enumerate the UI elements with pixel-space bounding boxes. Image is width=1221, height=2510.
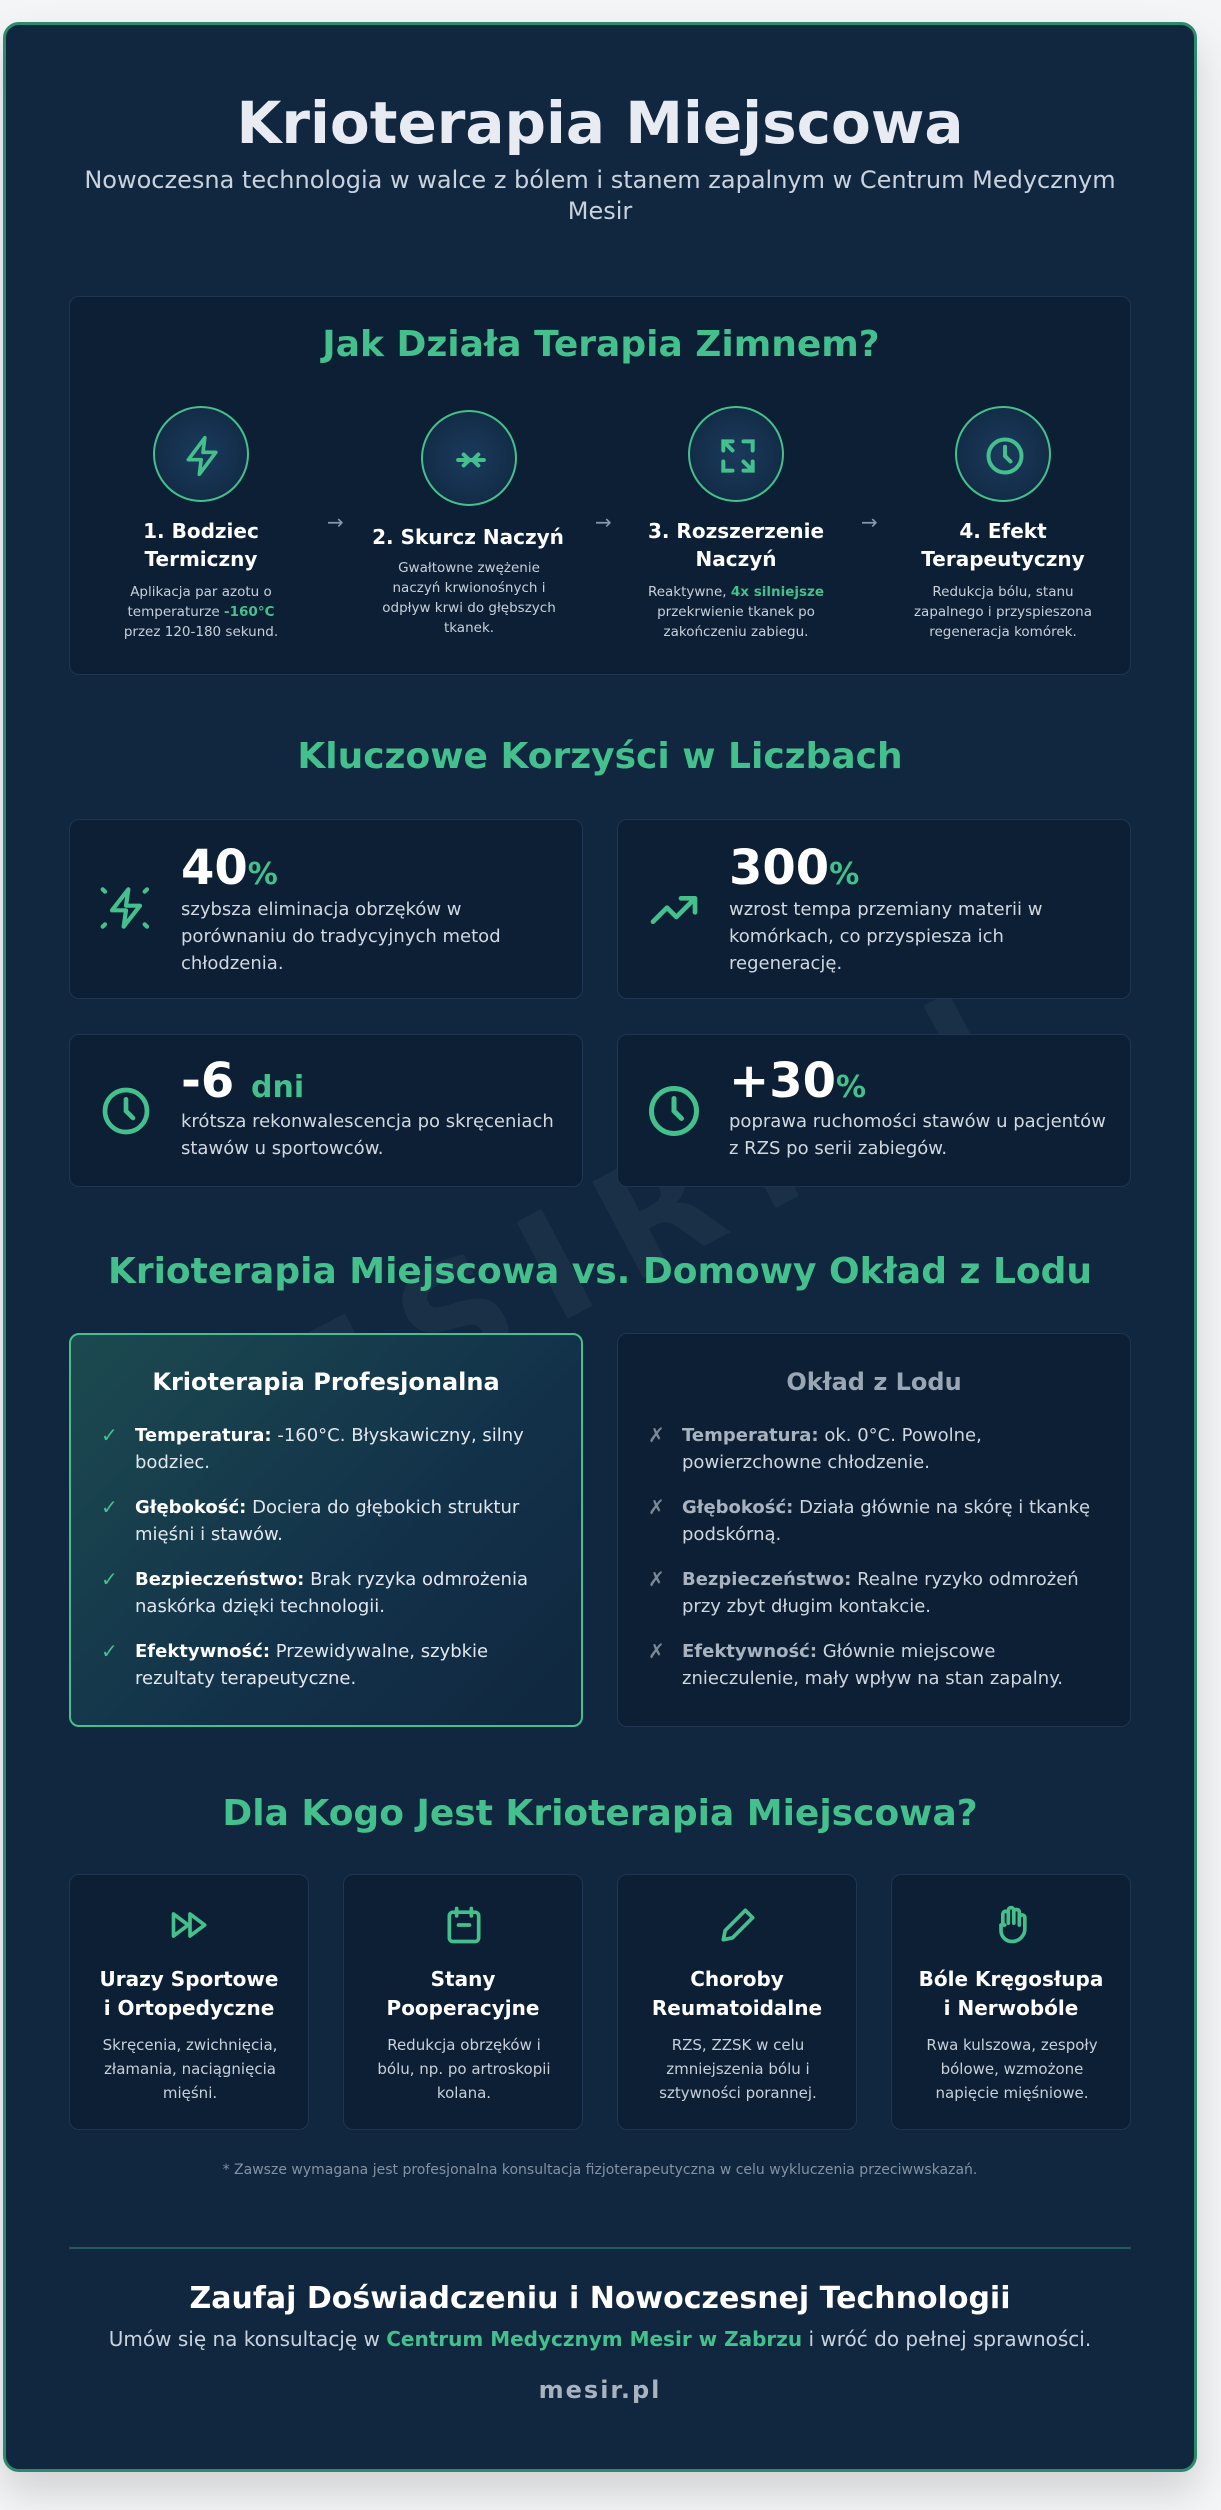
icon: clock: [102, 1088, 150, 1134]
item safety: Bezpieczeństwo: Brak ryzyka odmrożenia naskórka dzięki technologii.: [135, 1569, 528, 1617]
card: rheumatoid: Choroby: [690, 1967, 784, 1991]
item temperature: Temperatura: ok. 0°C. Powolne, powierzchowne chłodzenie.: [682, 1425, 982, 1473]
title: Krioterapia Miejscowa: [236, 89, 964, 157]
icon: lightning: [153, 406, 249, 502]
stat card 2: wzrost tempa przemiany materii w komórkach, co przyspiesza ich regenerację.: [729, 899, 1042, 974]
footer text: Umów się na konsultację w Centrum Medycznym Mesir w Zabrzu i wróć do pełnej sprawności.: [109, 2327, 1091, 2351]
heading: comparison: Krioterapia Miejscowa vs. Domowy Okład z Lodu: [108, 1251, 1092, 1292]
icon: hand: [999, 1906, 1027, 1944]
panel: professional: [69, 1333, 583, 1727]
heading: how it works: Jak Działa Terapia Zimnem?: [322, 324, 880, 365]
stat card 3: [69, 1034, 583, 1187]
card: sports injuries: [69, 1874, 309, 2130]
icon: trending up: [650, 896, 698, 924]
item depth: Głębokość: Dociera do głębokich struktur mięśni i stawów.: [135, 1497, 519, 1545]
card: rheumatoid: [617, 1874, 857, 2130]
card: postoperative: Pooperacyjne: [387, 1996, 539, 2020]
panel: ice pack: ✗: [648, 1495, 665, 1519]
panel: professional: ✓: [101, 1495, 118, 1519]
icon: fast forward: [172, 1912, 207, 1938]
step 1: 1. Bodziec Termiczny: [143, 519, 259, 571]
stat card 1: 40%: [181, 840, 278, 896]
arrow 3: →: [861, 510, 878, 534]
heading: benefits: Kluczowe Korzyści w Liczbach: [297, 736, 903, 777]
item temperature: Temperatura: -160°C. Błyskawiczny, silny bodziec.: [135, 1425, 524, 1473]
heading: for whom: Dla Kogo Jest Krioterapia Miejscowa?: [222, 1793, 978, 1834]
subtitle: Nowoczesna technologia w walce z bólem i stanem zapalnym w Centrum Medycznym Mesir: [84, 166, 1116, 225]
step 3: [648, 406, 824, 640]
icon: sparkle bolt: [100, 887, 150, 929]
card: rheumatoid: RZS, ZZSK w celu zmniejszenia bólu i sztywności porannej.: [659, 2036, 817, 2102]
stat card 2: [617, 819, 1131, 999]
icon: contract: [421, 410, 517, 506]
card: postoperative: Redukcja obrzęków i bólu, np. po artroskopii kolana.: [377, 2036, 551, 2102]
card: sports injuries: i Ortopedyczne: [104, 1996, 274, 2020]
panel: ice pack: ✗: [648, 1567, 665, 1591]
card: sports injuries: Skręcenia, zwichnięcia, złamania, naciągnięcia mięśni.: [103, 2036, 277, 2102]
item depth: Głębokość: Działa głównie na skórę i tkankę podskórną.: [682, 1497, 1090, 1545]
footer heading: Zaufaj Doświadczeniu i Nowoczesnej Technologii: [189, 2281, 1010, 2316]
stat card 1: [69, 819, 583, 999]
website: mesir.pl: [539, 2376, 661, 2404]
step 3: Reaktywne, 4x silniejsze przekrwienie tkanek po zakończeniu zabiegu.: [648, 584, 824, 640]
step 2: 2. Skurcz Naczyń: [372, 525, 564, 549]
item safety: Bezpieczeństwo: Realne ryzyko odmrożeń przy zbyt długim kontakcie.: [682, 1569, 1079, 1617]
panel: professional: ✓: [101, 1639, 118, 1663]
stat card 3: krótsza rekonwalescencja po skręceniach stawów u sportowców.: [181, 1111, 554, 1159]
icon: clock: [955, 406, 1051, 502]
card: spine: Bóle Kręgosłupa: [919, 1967, 1103, 1991]
panel: professional: ✓: [101, 1423, 118, 1447]
panel: ice pack: ✗: [648, 1423, 665, 1447]
icon: calendar: [448, 1906, 480, 1944]
item effectiveness: Efektywność: Przewidywalne, szybkie rezultaty terapeutyczne.: [135, 1641, 488, 1689]
arrow 1: →: [327, 510, 344, 534]
step 4: Redukcja bólu, stanu zapalnego i przyspieszona regeneracja komórek.: [914, 584, 1092, 640]
icon: pencil: [722, 1908, 755, 1942]
card: spine: i Nerwobóle: [944, 1996, 1078, 2020]
step 2: [372, 410, 564, 636]
panel: ice pack: ✗: [648, 1639, 665, 1663]
card: postoperative: [343, 1874, 583, 2130]
card: rheumatoid: Reumatoidalne: [652, 1996, 822, 2020]
step 3: 3. Rozszerzenie Naczyń: [648, 519, 824, 571]
icon: clock: [649, 1086, 699, 1136]
stat card 2: 300%: [729, 840, 859, 896]
box title: Okład z Lodu: [786, 1368, 962, 1396]
card: spine: [891, 1874, 1131, 2130]
step 4: 4. Efekt Terapeutyczny: [921, 519, 1085, 571]
card: spine: Rwa kulszowa, zespoły bólowe, wzmożone napięcie mięśniowe.: [926, 2036, 1098, 2102]
footnote: * Zawsze wymagana jest profesjonalna konsultacja fizjoterapeutyczna w celu wykluczenia przeciwwskazań.: [223, 2162, 977, 2178]
icon: expand: [688, 406, 784, 502]
card: postoperative: Stany: [431, 1967, 495, 1991]
stat card 3: -6 dni: [181, 1053, 304, 1109]
stat card 4: [617, 1034, 1131, 1187]
step 1: [124, 406, 278, 640]
panel: ice pack: [617, 1333, 1131, 1727]
step 4: [914, 406, 1092, 640]
card: sports injuries: Urazy Sportowe: [100, 1967, 278, 1991]
arrow 2: →: [595, 510, 612, 534]
stat card 1: szybsza eliminacja obrzęków w porównaniu do tradycyjnych metod chłodzenia.: [181, 899, 501, 974]
stat card 4: +30%: [729, 1053, 866, 1109]
panel: professional: ✓: [101, 1567, 118, 1591]
item effectiveness: Efektywność: Głównie miejscowe znieczulenie, mały wpływ na stan zapalny.: [682, 1641, 1063, 1689]
panel: how it works: [69, 296, 1131, 675]
step 1: Aplikacja par azotu o temperaturze -160°C przez 120-180 sekund.: [124, 584, 278, 640]
watermark: MESIR.PL: [94, 928, 1090, 1568]
step 2: Gwałtowne zwężenie naczyń krwionośnych i odpływ krwi do głębszych tkanek.: [382, 560, 556, 636]
box title: Krioterapia Profesjonalna: [152, 1368, 500, 1396]
stat card 4: poprawa ruchomości stawów u pacjentów z RZS po serii zabiegów.: [729, 1111, 1106, 1159]
